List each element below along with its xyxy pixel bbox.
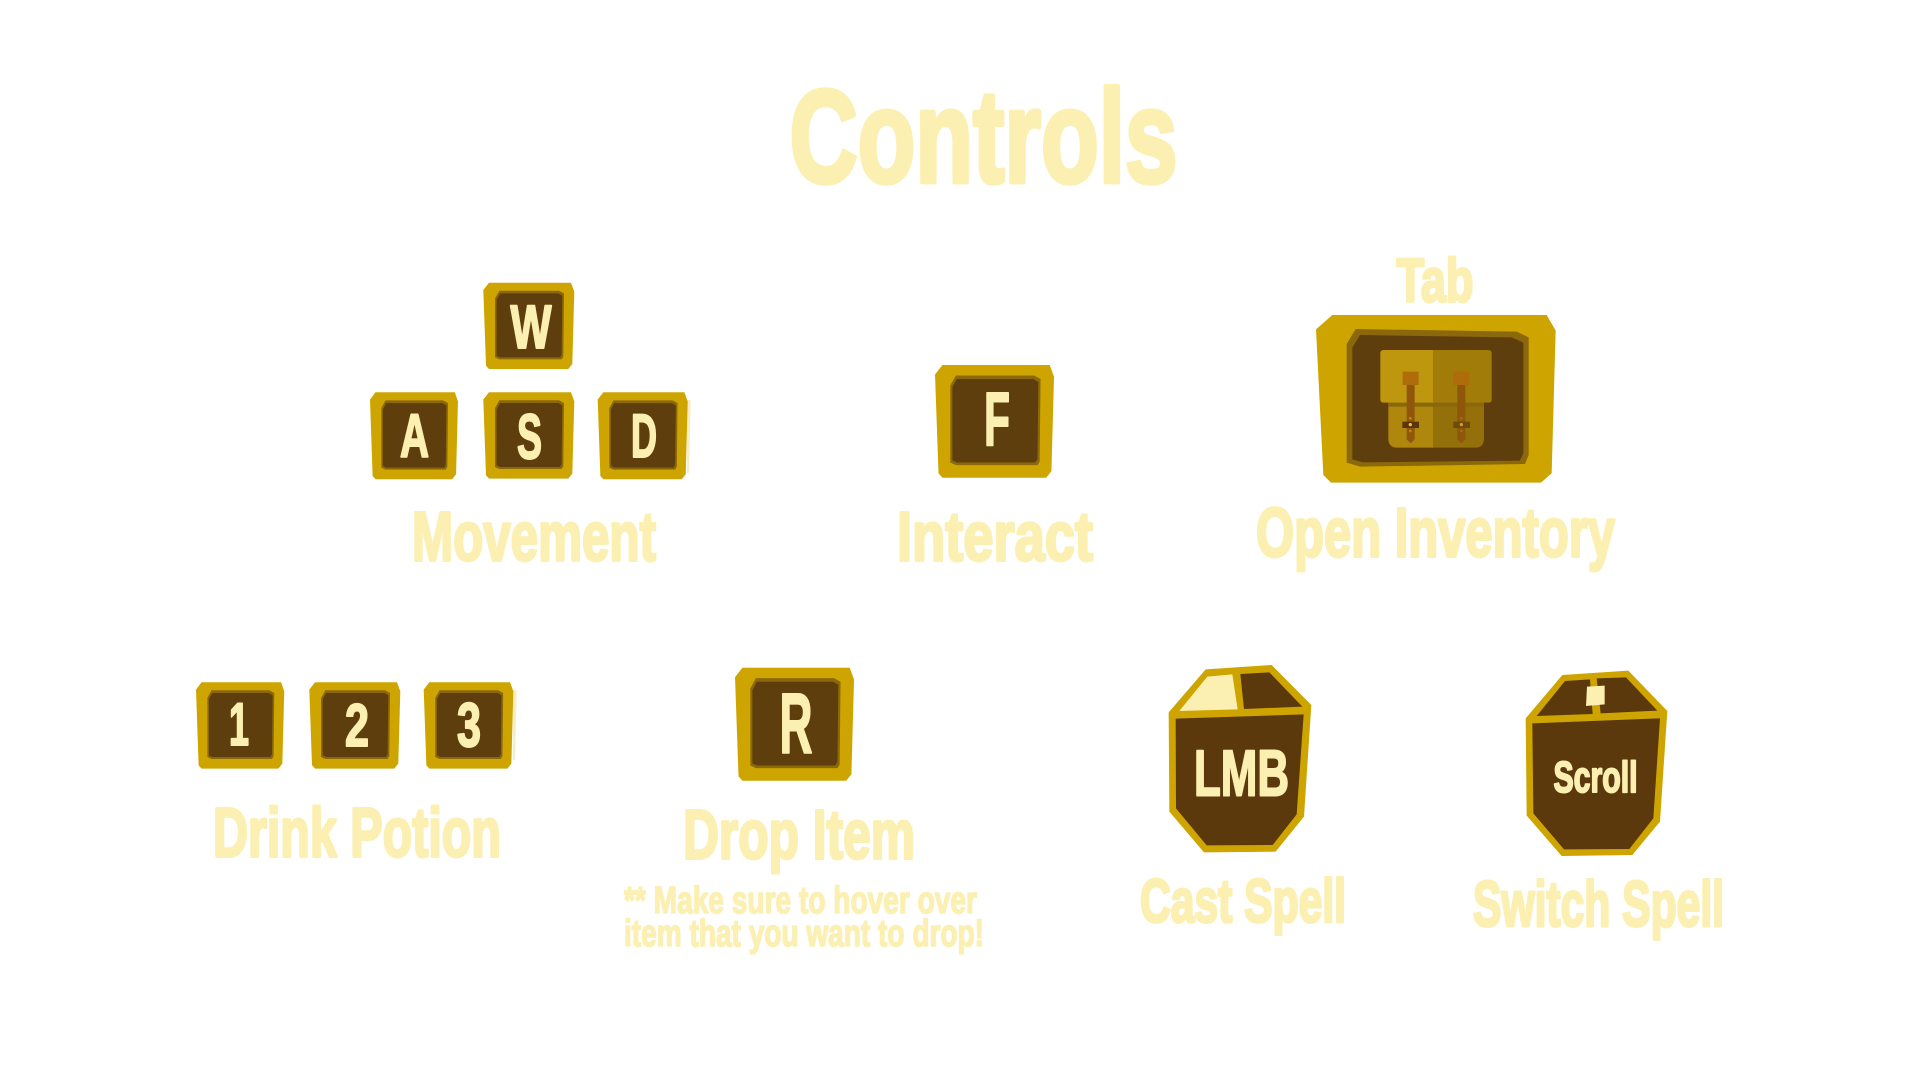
icon: scroll mouse xyxy=(1526,671,1667,856)
panel: drink potion xyxy=(196,682,517,872)
key: A xyxy=(370,392,458,479)
key: 1 xyxy=(196,682,284,769)
note: hover over item: ** Make sure to hover over xyxy=(624,880,977,922)
panel: cast spell xyxy=(1140,665,1346,935)
key: F: F xyxy=(984,377,1010,462)
key: LMB: LMB xyxy=(1194,736,1289,810)
title: Controls xyxy=(790,63,1178,210)
key: R xyxy=(735,668,854,781)
icon: left mouse button xyxy=(1169,665,1311,852)
key: D xyxy=(598,392,691,479)
panel: switch spell xyxy=(1473,671,1724,940)
key: A: A xyxy=(400,402,429,470)
note: hover over item: item that you want to drop! xyxy=(624,913,984,955)
key: S: S xyxy=(517,402,542,472)
key: W xyxy=(483,283,574,369)
key: 1: 1 xyxy=(229,691,249,758)
key: W: W xyxy=(510,293,552,361)
key: D: D xyxy=(631,402,657,470)
label: tab: Tab xyxy=(1396,246,1474,314)
label: interact: Interact xyxy=(897,498,1093,576)
panel: open inventory xyxy=(1256,246,1615,572)
label: drink potion: Drink Potion xyxy=(213,794,501,872)
key: F xyxy=(935,365,1054,478)
icon: inventory backpack key xyxy=(1316,315,1556,483)
label: open inventory: Open Inventory xyxy=(1256,494,1615,572)
key: 2: 2 xyxy=(345,692,369,759)
label: switch spell: Switch Spell xyxy=(1473,868,1724,940)
label: movement: Movement xyxy=(412,498,656,576)
key: 3: 3 xyxy=(457,692,481,760)
note: hover over item xyxy=(624,880,984,955)
key: S xyxy=(483,392,574,479)
key: 2 xyxy=(309,682,400,769)
panel: interact xyxy=(897,365,1093,576)
panel: drop item xyxy=(624,668,984,955)
key: scroll: Scroll xyxy=(1554,753,1638,802)
label: cast spell: Cast Spell xyxy=(1140,867,1346,935)
key: R: R xyxy=(780,677,812,772)
panel: movement xyxy=(370,283,691,576)
key: 3 xyxy=(424,682,517,769)
label: drop item: Drop Item xyxy=(683,796,915,874)
